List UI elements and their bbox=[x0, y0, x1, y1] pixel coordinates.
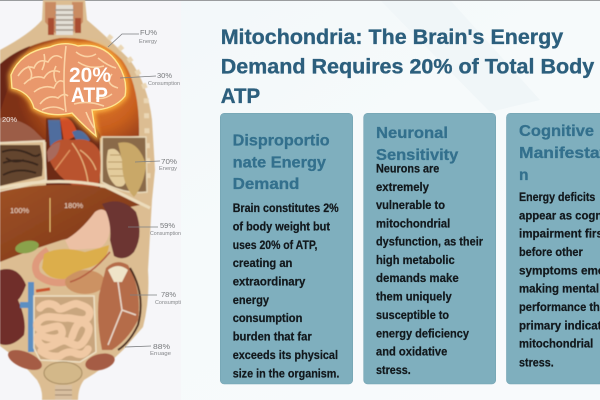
body text: disproportionate energy demand: size in the organism. bbox=[233, 368, 339, 380]
body text: neuronal sensitivity: them uniquely bbox=[376, 291, 452, 303]
callout: FU% energy bbox=[108, 30, 157, 47]
brain label: 20% ATP bbox=[69, 64, 111, 107]
blue vein bbox=[20, 282, 34, 352]
anatomy illustration panel bbox=[0, 0, 181, 400]
heading: disproportionate energy demand: nate Energy bbox=[233, 155, 326, 172]
heart bbox=[47, 117, 101, 188]
body text: neuronal sensitivity: mitochondrial bbox=[376, 218, 450, 230]
body text: disproportionate energy demand bbox=[233, 203, 339, 380]
duodenum bbox=[36, 250, 68, 283]
callout: 88% energy bbox=[125, 344, 171, 357]
panel: cognitive manifestation bbox=[506, 113, 600, 384]
callout: 30% consumption: 30% bbox=[157, 73, 172, 80]
liver labels bbox=[10, 201, 84, 215]
brain bbox=[11, 44, 126, 136]
liver labels: 100% bbox=[10, 206, 30, 215]
heading: disproportionate energy demand bbox=[233, 133, 330, 193]
anatomical torso drawing bbox=[0, 0, 155, 400]
body text: disproportionate energy demand: Brain constitutes 2% bbox=[233, 203, 339, 215]
callout: FU% energy: FU% bbox=[140, 30, 157, 37]
callout: 88% energy: 88% bbox=[153, 344, 170, 351]
body text: neuronal sensitivity: susceptible to bbox=[376, 310, 449, 322]
body text: cognitive manifestation: Energy deficits bbox=[519, 192, 595, 204]
callout: 70% energy: 70% bbox=[161, 159, 177, 166]
intestines bbox=[34, 296, 96, 362]
liver bbox=[0, 181, 150, 262]
callout: 30% consumption: Consumption bbox=[148, 81, 180, 87]
liver labels: 180% bbox=[64, 201, 84, 210]
heading: disproportionate energy demand: Disproportio bbox=[233, 133, 330, 150]
heading: neuronal sensitivity bbox=[376, 125, 458, 164]
body text: neuronal sensitivity: stress. bbox=[376, 365, 411, 377]
callout: 30% consumption bbox=[120, 73, 180, 87]
body text: cognitive manifestation: mitochondrial bbox=[519, 339, 593, 351]
pancreas bbox=[42, 245, 109, 279]
panel: neuronal sensitivity bbox=[364, 113, 496, 384]
body text: cognitive manifestation: stress. bbox=[519, 357, 554, 369]
body text: neuronal sensitivity: dysfunction, as their bbox=[376, 236, 483, 248]
stomach bbox=[65, 210, 110, 250]
title: Mitochondria: The Brain's Energy bbox=[221, 25, 563, 49]
upper right compartment organs bbox=[102, 137, 147, 197]
muscle organ bbox=[98, 262, 141, 350]
body text: neuronal sensitivity: energy deficiency bbox=[376, 328, 470, 340]
body text: neuronal sensitivity: Neurons are bbox=[376, 163, 439, 175]
title: Demand Requires 20% of Total Body bbox=[221, 54, 594, 78]
upper left organ bbox=[0, 118, 44, 144]
body text: cognitive manifestation: making mental bbox=[519, 284, 599, 296]
title bbox=[221, 25, 594, 108]
kidney bbox=[0, 269, 26, 345]
spleen bbox=[102, 201, 140, 258]
bowel tissue bbox=[65, 270, 105, 294]
callout: 78% consumption: Consumpti bbox=[155, 300, 181, 306]
heading: neuronal sensitivity: Sensitivity bbox=[376, 147, 458, 164]
pelvis bbox=[5, 346, 116, 400]
callout: 59% consumption: 59% bbox=[160, 223, 175, 230]
body text: neuronal sensitivity bbox=[376, 163, 483, 377]
title: ATP bbox=[221, 84, 260, 108]
heading: disproportionate energy demand: Demand bbox=[233, 176, 299, 193]
heading: cognitive manifestation bbox=[519, 123, 600, 184]
left organ label: 20% bbox=[2, 115, 17, 124]
heading: cognitive manifestation: n bbox=[519, 167, 528, 184]
callout: 70% energy bbox=[135, 159, 177, 172]
body text: neuronal sensitivity: vulnerable to bbox=[376, 200, 445, 212]
body text: cognitive manifestation: before other bbox=[519, 247, 583, 259]
callout: FU% energy: Energy bbox=[139, 39, 157, 45]
chest cavity bbox=[0, 38, 139, 190]
body text: disproportionate energy demand: burden that far bbox=[233, 331, 312, 343]
brain label: 20% ATP: 20% bbox=[69, 64, 111, 87]
body text: disproportionate energy demand: uses 20% of ATP, bbox=[233, 240, 317, 252]
heading: neuronal sensitivity: Neuronal bbox=[376, 125, 448, 142]
body text: disproportionate energy demand: extraordinary bbox=[233, 276, 306, 288]
gallbladder bbox=[14, 239, 40, 255]
panel: disproportionate energy demand bbox=[220, 113, 353, 384]
callout: 78% consumption: 78% bbox=[161, 292, 176, 299]
body text: neuronal sensitivity: extremely bbox=[376, 182, 430, 194]
body text: neuronal sensitivity: and oxidative bbox=[376, 347, 447, 359]
callout: 78% consumption bbox=[130, 292, 181, 306]
body text: neuronal sensitivity: demands make bbox=[376, 273, 459, 285]
body text: cognitive manifestation bbox=[519, 192, 600, 369]
body text: disproportionate energy demand: consumption bbox=[233, 313, 302, 325]
spine in neck bbox=[55, 5, 74, 35]
brain label: 20% ATP: ATP bbox=[71, 84, 108, 107]
left lung bbox=[0, 145, 43, 186]
body text: neuronal sensitivity: high metabolic bbox=[376, 255, 455, 267]
callout: 59% consumption bbox=[128, 223, 181, 237]
callout: 59% consumption: Consumption bbox=[150, 231, 181, 237]
callout: 88% energy: Enuage bbox=[150, 351, 171, 357]
body text: disproportionate energy demand: exceeds its physical bbox=[233, 350, 338, 362]
callout: 70% energy: Energy bbox=[159, 166, 177, 172]
heading: cognitive manifestation: Cognitive bbox=[519, 123, 594, 140]
body text: disproportionate energy demand: energy bbox=[233, 295, 270, 307]
body text: disproportionate energy demand: creating an bbox=[233, 258, 292, 270]
body text: disproportionate energy demand: of body weight but bbox=[233, 221, 330, 233]
